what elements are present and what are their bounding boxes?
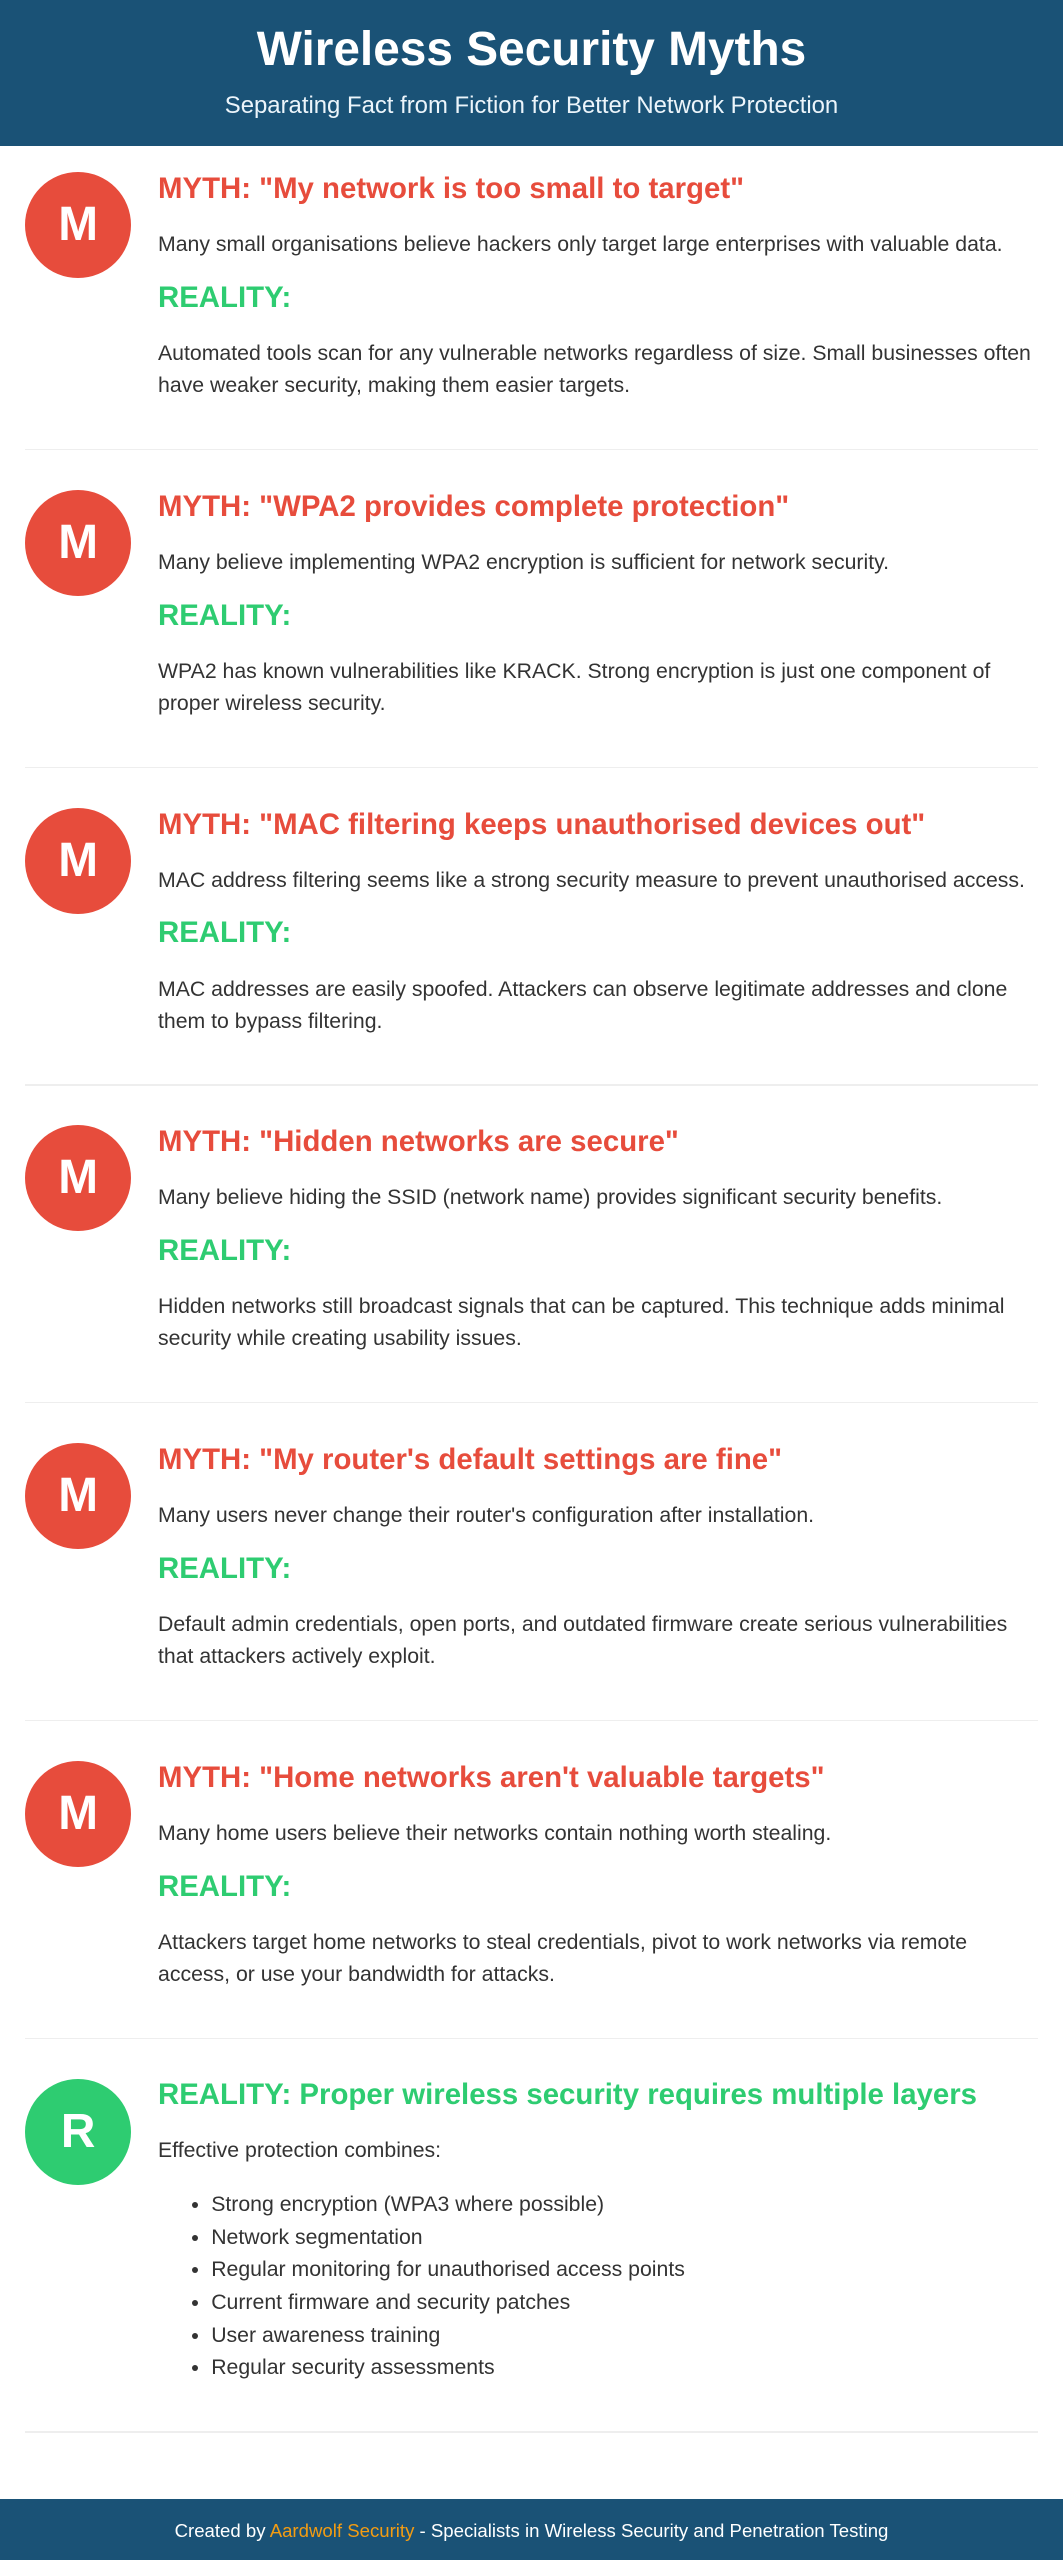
myth description: Many believe implementing WPA2 encryption is sufficient for network security. xyxy=(158,550,889,574)
reality heading: REALITY: Proper wireless security requires multiple layers xyxy=(158,2078,977,2111)
icon: myth badge xyxy=(25,1761,131,1867)
myth description: Many small organisations believe hackers only target large enterprises with valuable data. xyxy=(158,232,1003,256)
reality explanation xyxy=(158,659,990,715)
bullet list of protections: Strong encryption (WPA3 where possible) xyxy=(211,2192,604,2216)
subtitle: Separating Fact from Fiction for Better Network Protection xyxy=(225,92,838,119)
myth heading: MYTH: "My router's default settings are fine" xyxy=(158,1443,782,1476)
header banner xyxy=(0,0,1063,146)
icon: myth badge: M xyxy=(58,1151,98,1204)
reality heading: REALITY: xyxy=(158,1552,291,1584)
bullet list of protections: Regular monitoring for unauthorised access points xyxy=(211,2257,685,2281)
myth heading: MYTH: "Home networks aren't valuable targets" xyxy=(158,1761,825,1794)
reality explanation xyxy=(158,341,1031,397)
reality heading: REALITY: xyxy=(158,1870,291,1902)
panel: myth 6 xyxy=(25,1761,1038,2039)
icon: myth badge xyxy=(25,490,131,596)
reality explanation: security while creating usability issues. xyxy=(158,1326,522,1350)
footer credit: Created by Aardwolf Security - Specialists in Wireless Security and Penetration Testing xyxy=(175,2520,888,2541)
reality explanation: WPA2 has known vulnerabilities like KRACK. Strong encryption is just one component of xyxy=(158,659,990,683)
myth description: Many users never change their router's configuration after installation. xyxy=(158,1503,814,1527)
reality explanation: Hidden networks still broadcast signals that can be captured. This technique adds minimal xyxy=(158,1294,1005,1318)
icon: myth badge xyxy=(25,1125,131,1231)
reality heading: REALITY: xyxy=(158,598,291,632)
icon: myth badge: M xyxy=(58,1469,98,1522)
reality explanation xyxy=(158,1930,967,1986)
bullet list of protections: Regular security assessments xyxy=(211,2355,495,2379)
reality heading: REALITY: xyxy=(158,916,291,949)
bullet list of protections: Current firmware and security patches xyxy=(211,2290,570,2314)
icon: reality badge xyxy=(25,2078,131,2185)
icon: reality badge: R xyxy=(61,2104,95,2158)
reality explanation: Automated tools scan for any vulnerable networks regardless of size. Small businesses often xyxy=(158,341,1031,365)
reality explanation: proper wireless security. xyxy=(158,691,386,715)
intro text: Effective protection combines: xyxy=(158,2138,441,2162)
panel: myth 5 xyxy=(25,1443,1038,1721)
bullet list of protections: Network segmentation xyxy=(211,2225,423,2249)
bullet list of protections xyxy=(192,2192,685,2379)
title: Wireless Security Myths xyxy=(257,22,806,76)
reality explanation xyxy=(158,1612,1007,1668)
icon: myth badge xyxy=(25,172,131,278)
panel: myth 1 xyxy=(25,172,1038,450)
myth description: MAC address filtering seems like a strong security measure to prevent unauthorised access. xyxy=(158,868,1025,892)
reality explanation: Attackers target home networks to steal credentials, pivot to work networks via remote xyxy=(158,1930,967,1954)
icon: myth badge: M xyxy=(58,198,98,251)
myth heading: MYTH: "WPA2 provides complete protection" xyxy=(158,490,789,523)
myth description: Many home users believe their networks contain nothing worth stealing. xyxy=(158,1821,831,1845)
reality explanation xyxy=(158,976,1007,1032)
panel: myth 4 xyxy=(25,1125,1038,1403)
reality explanation: that attackers actively exploit. xyxy=(158,1644,436,1668)
icon: myth badge: M xyxy=(58,834,98,886)
myth description: Many believe hiding the SSID (network name) provides significant security benefits. xyxy=(158,1185,942,1209)
icon: myth badge xyxy=(25,1443,131,1549)
reality explanation: them to bypass filtering. xyxy=(158,1008,382,1032)
icon: myth badge: M xyxy=(58,1787,98,1840)
reality explanation: access, or use your bandwidth for attacks. xyxy=(158,1962,555,1986)
icon: myth badge: M xyxy=(58,516,98,569)
panel: reality summary xyxy=(25,2078,1038,2433)
reality heading: REALITY: xyxy=(158,280,291,314)
icon: myth badge xyxy=(25,808,131,914)
reality explanation xyxy=(158,1294,1005,1350)
bullet list of protections: User awareness training xyxy=(211,2323,440,2347)
reality explanation: have weaker security, making them easier targets. xyxy=(158,373,630,397)
reality heading: REALITY: xyxy=(158,1234,291,1266)
footer banner xyxy=(0,2499,1063,2560)
myth heading: MYTH: "My network is too small to target" xyxy=(158,172,744,205)
myth heading: MYTH: "Hidden networks are secure" xyxy=(158,1125,679,1158)
reality explanation: MAC addresses are easily spoofed. Attackers can observe legitimate addresses and clone xyxy=(158,976,1007,1000)
myth heading: MYTH: "MAC filtering keeps unauthorised devices out" xyxy=(158,808,925,840)
reality explanation: Default admin credentials, open ports, and outdated firmware create serious vulnerabilities xyxy=(158,1612,1007,1636)
panel: myth 3 xyxy=(25,808,1038,1086)
panel: myth 2 xyxy=(25,490,1038,768)
